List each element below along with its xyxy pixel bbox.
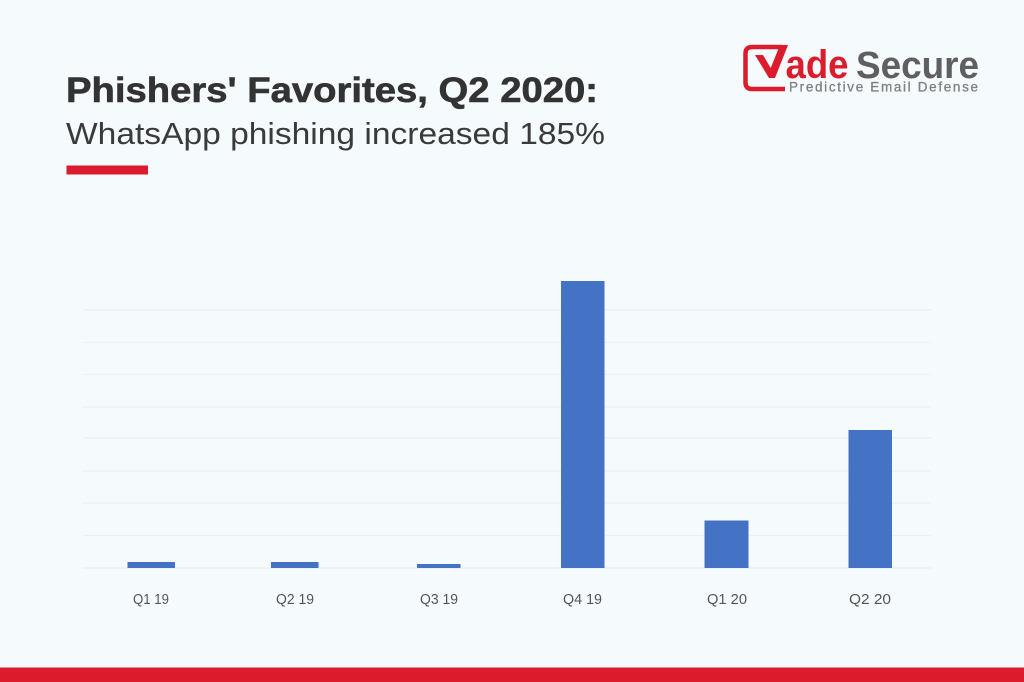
axis labels: Q3 19 bbox=[420, 592, 458, 608]
icon: check mark V bbox=[755, 45, 788, 78]
title accent bar bbox=[66, 166, 148, 174]
axis labels: Q2 20 bbox=[849, 592, 891, 608]
subtitle: WhatsApp phishing increased 185% bbox=[66, 116, 605, 151]
logo: Vade Secure bbox=[746, 43, 979, 94]
axis labels: Q1 20 bbox=[707, 592, 747, 608]
axis labels: Q2 19 bbox=[276, 592, 314, 608]
logo word: Secure: Secure bbox=[856, 45, 979, 87]
bar: Q3 19 bbox=[417, 564, 460, 568]
bar: Q2 20 bbox=[848, 430, 892, 568]
bar chart bbox=[83, 281, 931, 608]
footer bar bbox=[0, 668, 1024, 682]
bar: Q2 19 bbox=[271, 562, 318, 568]
bar: Q1 19 bbox=[128, 562, 175, 568]
bar: Q1 20 bbox=[704, 520, 748, 568]
bar: Q4 19 bbox=[561, 281, 604, 568]
axis labels bbox=[133, 592, 891, 608]
title: Phishers' Favorites, Q2 2020: bbox=[66, 71, 598, 110]
logo word: ade: ade bbox=[786, 43, 848, 87]
icon: checkbox bbox=[746, 47, 785, 89]
axis labels: Q4 19 bbox=[563, 592, 602, 608]
logo tagline: Predictive Email Defense bbox=[789, 80, 978, 94]
axis labels: Q1 19 bbox=[133, 592, 169, 608]
